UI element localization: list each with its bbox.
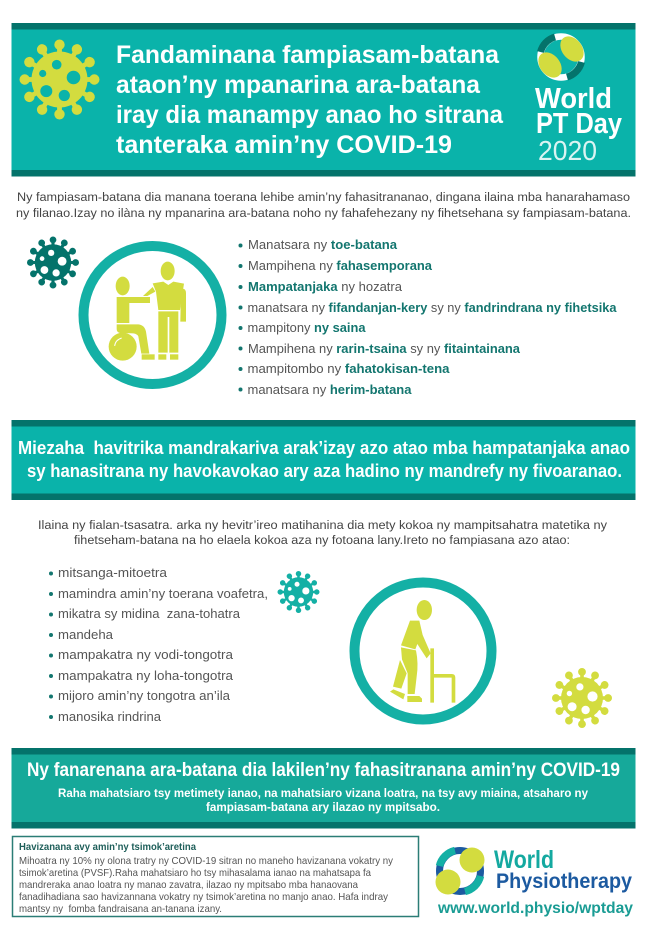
panel: post-viral fatigue note: fanadihadiana sao havizannana vokatry ny tsimok’aretina no manjo anao. Hafa indray bbox=[19, 892, 389, 903]
title: Fandaminana fampiasam-batana bbox=[116, 41, 500, 69]
panel: warning signs banner: Raha mahatsiaro tsy metimety ianao, na mahatsiaro vizana loatra, na tsy avy miaina, atsaharo ny bbox=[58, 786, 588, 800]
icon: dark teal virus bbox=[27, 236, 79, 288]
list: activities bbox=[49, 566, 268, 724]
list: exercise benefits: Manatsara ny toe-batana bbox=[248, 238, 398, 252]
panel: post-viral fatigue note: tsimok’aretina (PVSF).Raha mahatsiaro ho tsy mihasalama ianao na mahatsapa fa bbox=[19, 868, 371, 879]
text block: introduction bbox=[16, 190, 631, 220]
panel: post-viral fatigue note: mantsy ny fomba fandraisana an-tanana izany. bbox=[19, 904, 222, 915]
logo: World PT Day 2020: 2020 bbox=[538, 135, 597, 166]
list: exercise benefits: Mampihena ny fahasemporana bbox=[248, 259, 433, 273]
list: exercise benefits: manatsara ny herim-batana bbox=[248, 383, 413, 397]
list: exercise benefits: Mampihena ny rarin-tsaina sy ny fitaintainana bbox=[248, 342, 521, 356]
logo: World Physiotherapy bbox=[436, 846, 632, 894]
list: activities: mijoro amin’ny tongotra an’ila bbox=[58, 689, 230, 703]
panel: warning signs banner bbox=[12, 748, 636, 828]
logo: World PT Day 2020: World bbox=[535, 83, 612, 115]
icon: person walking with frame in circle bbox=[354, 582, 492, 720]
panel: post-viral fatigue note bbox=[12, 836, 418, 916]
icon: lime virus in header bbox=[20, 40, 100, 120]
website url: www.world.physio/wptday bbox=[437, 900, 633, 917]
list: exercise benefits bbox=[238, 238, 618, 397]
title bbox=[116, 41, 504, 159]
logo: World PT Day 2020: PT Day bbox=[536, 108, 622, 140]
list: activities: manosika rindrina bbox=[58, 710, 161, 724]
icon: teal virus bbox=[278, 571, 320, 613]
list: exercise benefits: manatsara ny fifandanjan-kery sy ny fandrindrana ny fihetsika bbox=[248, 301, 618, 315]
panel: post-viral fatigue note: mandreraka anao loatra ny manao zavatra, ilazao ny mpitsabo mba hanaovana bbox=[19, 880, 358, 891]
panel: exercise advice banner bbox=[12, 420, 636, 500]
list: activities: mampakatra ny vodi-tongotra bbox=[58, 648, 233, 662]
text block: walking guidance: Ilaina ny fialan-tsasatra. arka ny hevitr’ireo matihanina dia mety kokoa ny mampitsahatra matetika ny bbox=[38, 518, 608, 532]
title: iray dia manampy anao ho sitrana bbox=[116, 101, 504, 129]
logo: World Physiotherapy: World bbox=[494, 846, 554, 874]
list: activities: mitsanga-mitoetra bbox=[58, 566, 167, 580]
list: activities: mikatra sy midina zana-tohatra bbox=[58, 607, 240, 621]
text block: introduction: ny filanao.Izay no ilàna ny mpanarina ara-batana noho ny fahafehezany ny fihetsehana sy fampiasam-batana. bbox=[16, 206, 631, 220]
logo: World Physiotherapy: Physiotherapy bbox=[496, 869, 632, 893]
panel: post-viral fatigue note: Mihoatra ny 10% ny olona tratry ny COVID-19 sitran no maneho havizanana vokatry ny bbox=[19, 856, 394, 867]
logo: World PT Day 2020 bbox=[534, 32, 622, 166]
icon: therapist with seated patient in circle bbox=[84, 246, 222, 384]
panel: warning signs banner: fampiasam-batana ary ilazao ny mpitsabo. bbox=[206, 800, 440, 814]
title: tanteraka amin’ny COVID-19 bbox=[116, 131, 452, 159]
title: ataon’ny mpanarina ara-batana bbox=[116, 71, 481, 99]
list: exercise benefits: Mampatanjaka ny hozatra bbox=[248, 280, 402, 294]
list: exercise benefits: mampitony ny saina bbox=[248, 321, 367, 335]
list: activities: mandeha bbox=[58, 628, 113, 642]
panel: post-viral fatigue note: Havizanana avy amin’ny tsimok’aretina bbox=[19, 841, 196, 853]
icon: lime virus bbox=[552, 668, 612, 728]
text block: walking guidance: fihetseham-batana na ho elaela kokoa aza ny fotoana lany.Ireto no fampiasana azo atao: bbox=[74, 533, 570, 547]
text block: walking guidance bbox=[38, 518, 608, 547]
list: activities: mamindra amin’ny toerana voafetra, bbox=[58, 587, 268, 601]
text block: introduction: Ny fampiasam-batana dia manana toerana lehibe amin’ny fahasitrananao, dingana ilaina mba hanarahamaso bbox=[17, 190, 630, 204]
panel: header banner bbox=[12, 23, 636, 176]
list: exercise benefits: mampitombo ny fahatokisan-tena bbox=[248, 362, 451, 376]
list: activities: mampakatra ny loha-tongotra bbox=[58, 669, 233, 683]
